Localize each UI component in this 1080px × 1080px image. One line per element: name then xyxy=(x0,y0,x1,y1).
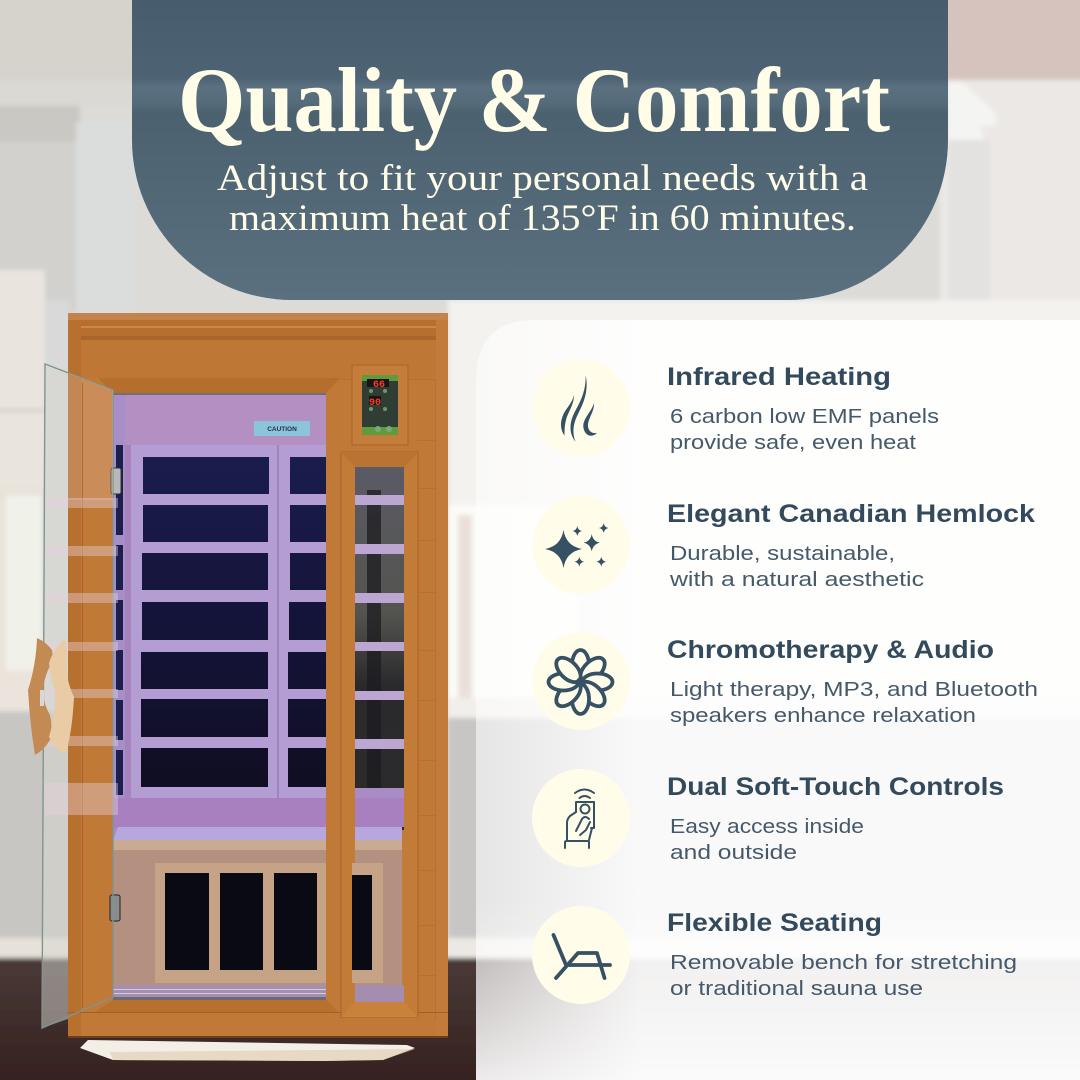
subtitle: Adjust to fit your personal needs with a xyxy=(217,158,868,199)
white translucent overlay panel xyxy=(476,320,1080,1080)
icon: hand with remote xyxy=(532,769,630,867)
plank seams xyxy=(340,379,436,1020)
interior xyxy=(113,393,326,1000)
description: with a natural aesthetic xyxy=(669,568,924,591)
back wall frames xyxy=(131,445,326,798)
heating panels xyxy=(141,457,326,787)
heading: Elegant Canadian Hemlock xyxy=(667,500,1035,528)
cabin outer frame xyxy=(68,313,448,1038)
description: Easy access inside xyxy=(670,815,864,838)
description: Removable bench for stretching xyxy=(670,951,1017,974)
open glass door xyxy=(42,364,118,1028)
description: Light therapy, MP3, and Bluetooth xyxy=(670,678,1038,701)
description xyxy=(670,405,939,454)
side window xyxy=(341,452,418,1017)
feature: chromotherapy xyxy=(532,632,1038,730)
description: and outside xyxy=(670,841,797,864)
door sill xyxy=(95,1000,338,1012)
heading: Infrared Heating xyxy=(667,363,891,391)
description xyxy=(670,815,864,864)
door hinge xyxy=(111,468,121,494)
description: speakers enhance relaxation xyxy=(670,704,976,727)
description: 6 carbon low EMF panels xyxy=(670,405,939,428)
description xyxy=(670,678,1038,727)
heading: Chromotherapy & Audio xyxy=(667,636,994,664)
icon: flower xyxy=(532,632,630,730)
feature: infrared heating xyxy=(532,359,939,457)
feature: flexible seating xyxy=(532,906,1017,1004)
heading: Dual Soft-Touch Controls xyxy=(667,773,1004,801)
feature: dual controls xyxy=(532,769,1004,867)
side wall strip xyxy=(113,395,125,840)
door hinge lower xyxy=(110,895,120,921)
sauna cabin xyxy=(28,313,448,1038)
floor mat xyxy=(80,1040,415,1061)
icon: sparkles xyxy=(532,496,630,594)
feature: canadian hemlock xyxy=(532,496,1035,594)
lower heater panel xyxy=(113,850,326,985)
heading: Flexible Seating xyxy=(667,909,882,937)
title: Quality & Comfort xyxy=(178,49,890,151)
floor slats xyxy=(113,985,326,1000)
description: Durable, sustainable, xyxy=(670,542,895,565)
control panel: 66 xyxy=(373,380,385,391)
description xyxy=(670,951,1017,1000)
control panel: 90 xyxy=(369,398,381,409)
bench xyxy=(113,798,326,850)
description xyxy=(669,542,924,591)
description: provide safe, even heat xyxy=(670,431,916,454)
icon: lounger xyxy=(532,906,630,1004)
subtitle: maximum heat of 135°F in 60 minutes. xyxy=(229,198,856,239)
caution label: CAUTION xyxy=(267,426,297,433)
description: or traditional sauna use xyxy=(670,977,923,1000)
control panel xyxy=(352,365,408,445)
caution label xyxy=(254,421,310,436)
title banner xyxy=(132,0,948,300)
door handle xyxy=(28,638,74,755)
subtitle xyxy=(217,158,868,239)
icon: heat waves xyxy=(532,359,630,457)
